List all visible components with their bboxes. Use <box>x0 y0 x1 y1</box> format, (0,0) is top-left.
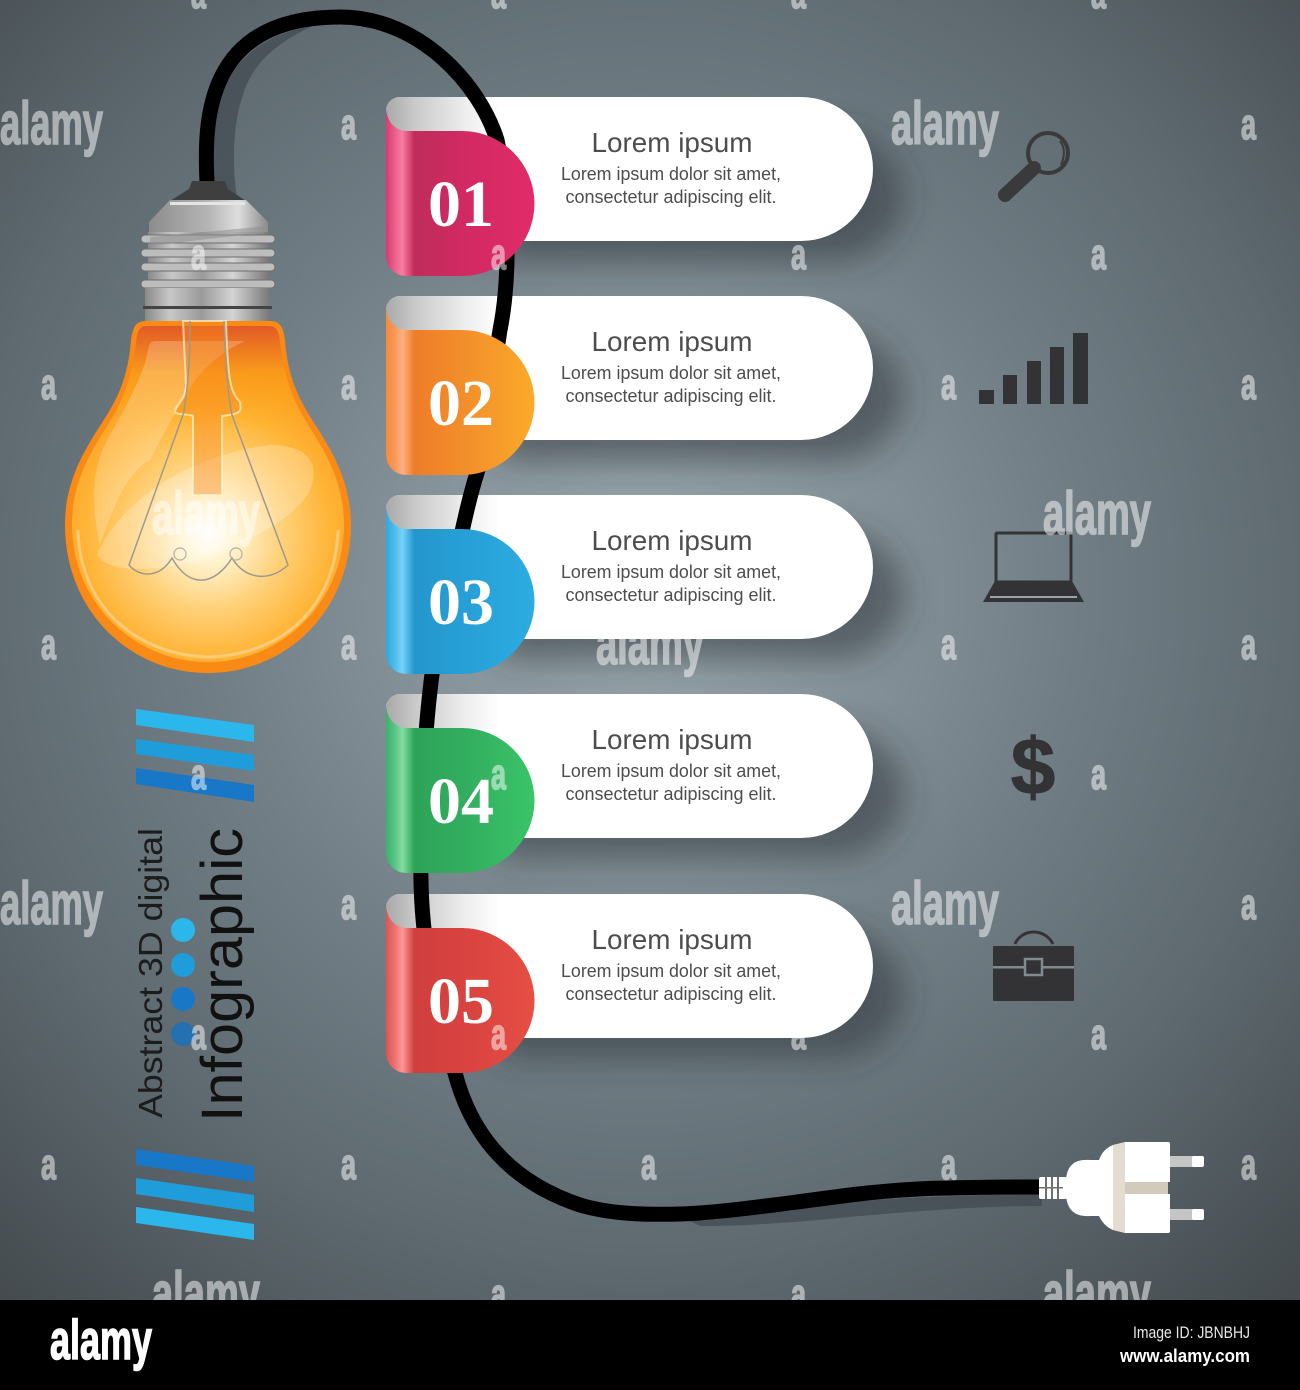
card 4 text: Lorem ipsum <box>592 724 752 755</box>
card 3 text: consectetur adipiscing elit. <box>566 585 776 605</box>
tab 01: 01 <box>428 168 494 241</box>
tab 04 <box>386 705 534 873</box>
watermark repeat: alamy <box>152 1260 260 1327</box>
watermark repeat: alamy <box>0 870 103 937</box>
power cable <box>206 17 1042 1214</box>
watermark repeat: a <box>1241 360 1256 409</box>
card 3 text: Lorem ipsum dolor sit amet, <box>561 562 781 582</box>
card 3 text: Lorem ipsum <box>592 525 752 556</box>
watermark repeat: a <box>1091 230 1106 279</box>
watermark repeat: a <box>491 750 506 799</box>
watermark repeat: a <box>341 620 356 669</box>
plug pins <box>1170 1156 1204 1220</box>
light bulb <box>65 181 351 673</box>
tab 02 <box>386 307 534 475</box>
watermark repeat: a <box>41 360 56 409</box>
watermark repeat: alamy <box>1043 1260 1151 1327</box>
watermark repeat: a <box>341 1140 356 1189</box>
bulb highlights <box>78 341 338 657</box>
plug <box>1039 1142 1204 1233</box>
card 2 panel <box>386 296 873 440</box>
top stripes <box>136 709 254 802</box>
card 1 text: Lorem ipsum dolor sit amet, <box>561 164 781 184</box>
card 2 text <box>561 326 781 406</box>
watermark repeat: a <box>191 750 206 799</box>
watermark repeat: a <box>491 230 506 279</box>
watermark repeat: a <box>1091 750 1106 799</box>
watermark repeat: a <box>791 230 806 279</box>
icon: laptop <box>983 533 1084 602</box>
cable shadows <box>212 26 1042 1226</box>
watermark repeat: a <box>1241 100 1256 149</box>
watermark repeat: alamy <box>596 610 704 677</box>
card 5 panel <box>386 894 873 1038</box>
card 5 text: Lorem ipsum dolor sit amet, <box>561 961 781 981</box>
watermark repeat: a <box>1091 1010 1106 1059</box>
plug band <box>1113 1142 1168 1233</box>
watermark repeat: alamy <box>891 90 999 157</box>
card 1 panel <box>386 97 873 241</box>
watermark repeat: a <box>191 1010 206 1059</box>
watermark repeat: alamy <box>152 480 260 547</box>
card 2 text: Lorem ipsum dolor sit amet, <box>561 363 781 383</box>
watermark repeat: a <box>491 1010 506 1059</box>
watermark repeat: alamy <box>891 870 999 937</box>
tab 05: 05 <box>428 965 494 1038</box>
tab 03: 03 <box>428 566 494 639</box>
watermark repeat: a <box>1241 1140 1256 1189</box>
card 1 text: consectetur adipiscing elit. <box>566 187 776 207</box>
watermark repeat: a <box>341 100 356 149</box>
card 5 text <box>561 924 781 1004</box>
card 4 panel <box>386 694 873 838</box>
card shadows <box>500 130 905 1059</box>
tab 04: 04 <box>428 765 494 838</box>
watermark repeat: alamy <box>0 90 103 157</box>
card 1 text <box>561 127 781 207</box>
icon: magnifier <box>1005 133 1068 195</box>
vertical title: Infographic <box>190 828 255 1122</box>
image id: Image ID: JBNBHJ <box>1133 1323 1250 1342</box>
plug grip <box>1039 1177 1067 1199</box>
plug head <box>1125 1142 1170 1233</box>
tab 02: 02 <box>428 367 494 440</box>
card 5 text: Lorem ipsum <box>592 924 752 955</box>
card 5 text: consectetur adipiscing elit. <box>566 984 776 1004</box>
watermark repeat: a <box>1241 880 1256 929</box>
icon: bar chart <box>979 333 1088 404</box>
watermark repeat: a <box>341 880 356 929</box>
card 1 text: Lorem ipsum <box>592 127 752 158</box>
bulb glass <box>65 321 351 673</box>
bulb filament <box>129 321 288 580</box>
card 3 text <box>561 525 781 605</box>
card 2 text: consectetur adipiscing elit. <box>566 386 776 406</box>
watermark repeat: a <box>41 620 56 669</box>
watermark repeat: a <box>941 1140 956 1189</box>
vertical subtitle: Abstract 3D digital <box>133 828 170 1118</box>
card 3 panel <box>386 495 873 639</box>
icon: briefcase <box>993 932 1074 1001</box>
watermark repeat: alamy <box>1043 480 1151 547</box>
watermark repeat: a <box>941 360 956 409</box>
decorative dots <box>171 918 195 1046</box>
watermark repeat: a <box>791 1010 806 1059</box>
plug body <box>1066 1142 1126 1233</box>
card 2 text: Lorem ipsum <box>592 326 752 357</box>
bottom stripes <box>136 1149 254 1240</box>
footer logo: alamy <box>50 1308 152 1371</box>
watermark repeat: a <box>191 230 206 279</box>
footer bar <box>0 1300 1300 1390</box>
watermark repeat: a <box>641 1140 656 1189</box>
bulb socket <box>141 181 275 321</box>
card 4 text: Lorem ipsum dolor sit amet, <box>561 761 781 781</box>
watermark repeat: a <box>341 360 356 409</box>
website: www.alamy.com <box>1119 1346 1250 1366</box>
card 4 text: consectetur adipiscing elit. <box>566 784 776 804</box>
watermark repeat: a <box>1241 620 1256 669</box>
tab 01 <box>386 108 534 276</box>
watermark repeat: a <box>491 1270 506 1319</box>
card 4 text <box>561 724 781 804</box>
tab 03 <box>386 506 534 674</box>
watermark repeat: a <box>941 620 956 669</box>
watermark repeat: a <box>41 1140 56 1189</box>
watermark repeat: a <box>791 1270 806 1319</box>
icon: dollar sign: $ <box>1011 722 1055 811</box>
tab 05 <box>386 905 534 1073</box>
